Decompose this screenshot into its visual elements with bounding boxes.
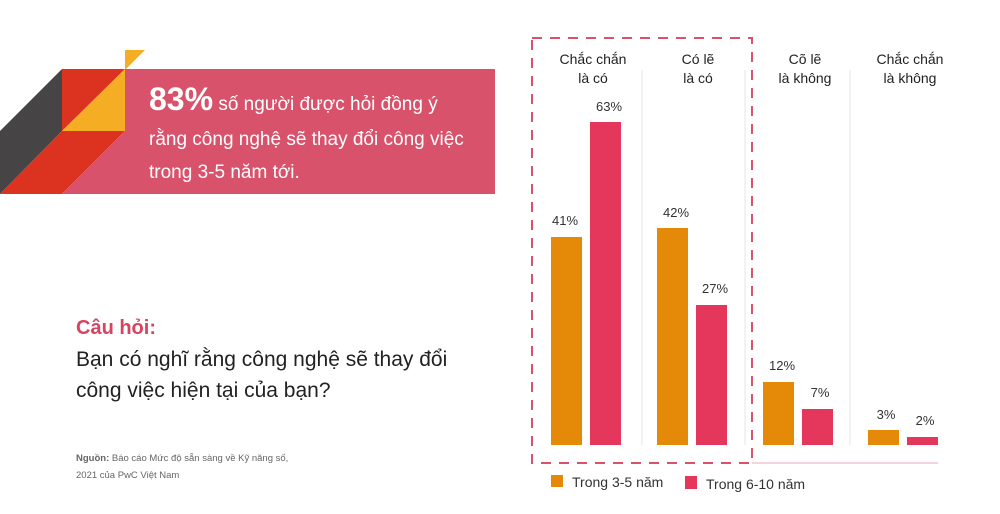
category labels: Chắc chắn	[877, 51, 943, 67]
category labels	[560, 51, 943, 86]
question text: công việc hiện tại của bạn?	[76, 379, 331, 402]
legend	[551, 474, 805, 492]
headline banner: 83% số người được hỏi đồng ý	[149, 81, 438, 117]
category labels: Chắc chắn	[560, 51, 626, 67]
value labels: 41%	[552, 213, 578, 228]
highlight dashed box	[532, 38, 752, 463]
category labels: Có lẽ	[682, 51, 715, 67]
source note: Nguồn: Báo cáo Mức độ sẵn sàng về Kỹ năng số,	[76, 453, 288, 464]
category labels: là có	[578, 70, 608, 86]
legend: Trong 3-5 năm	[572, 474, 663, 490]
source note: 2021 của PwC Việt Nam	[76, 470, 179, 481]
category labels: là không	[779, 70, 831, 86]
value labels	[552, 99, 935, 428]
question text: Bạn có nghĩ rằng công nghệ sẽ thay đổi	[76, 348, 447, 371]
value labels: 27%	[702, 281, 728, 296]
decorative banner shapes	[0, 50, 145, 194]
question text	[76, 348, 447, 402]
category labels: Cõ lẽ	[789, 51, 822, 67]
headline banner	[62, 69, 495, 194]
bars	[551, 122, 938, 445]
question heading: Câu hỏi:	[76, 317, 156, 339]
headline banner: trong 3-5 năm tới.	[149, 162, 300, 183]
category labels: là có	[683, 70, 713, 86]
legend: Trong 6-10 năm	[706, 476, 805, 492]
value labels: 7%	[811, 385, 830, 400]
source note	[76, 453, 288, 481]
value labels: 63%	[596, 99, 622, 114]
value labels: 12%	[769, 358, 795, 373]
value labels: 42%	[663, 205, 689, 220]
value labels: 2%	[916, 413, 935, 428]
bar chart	[551, 51, 943, 463]
category labels: là không	[884, 70, 936, 86]
value labels: 3%	[877, 407, 896, 422]
headline banner: rằng công nghệ sẽ thay đổi công việc	[149, 128, 464, 150]
